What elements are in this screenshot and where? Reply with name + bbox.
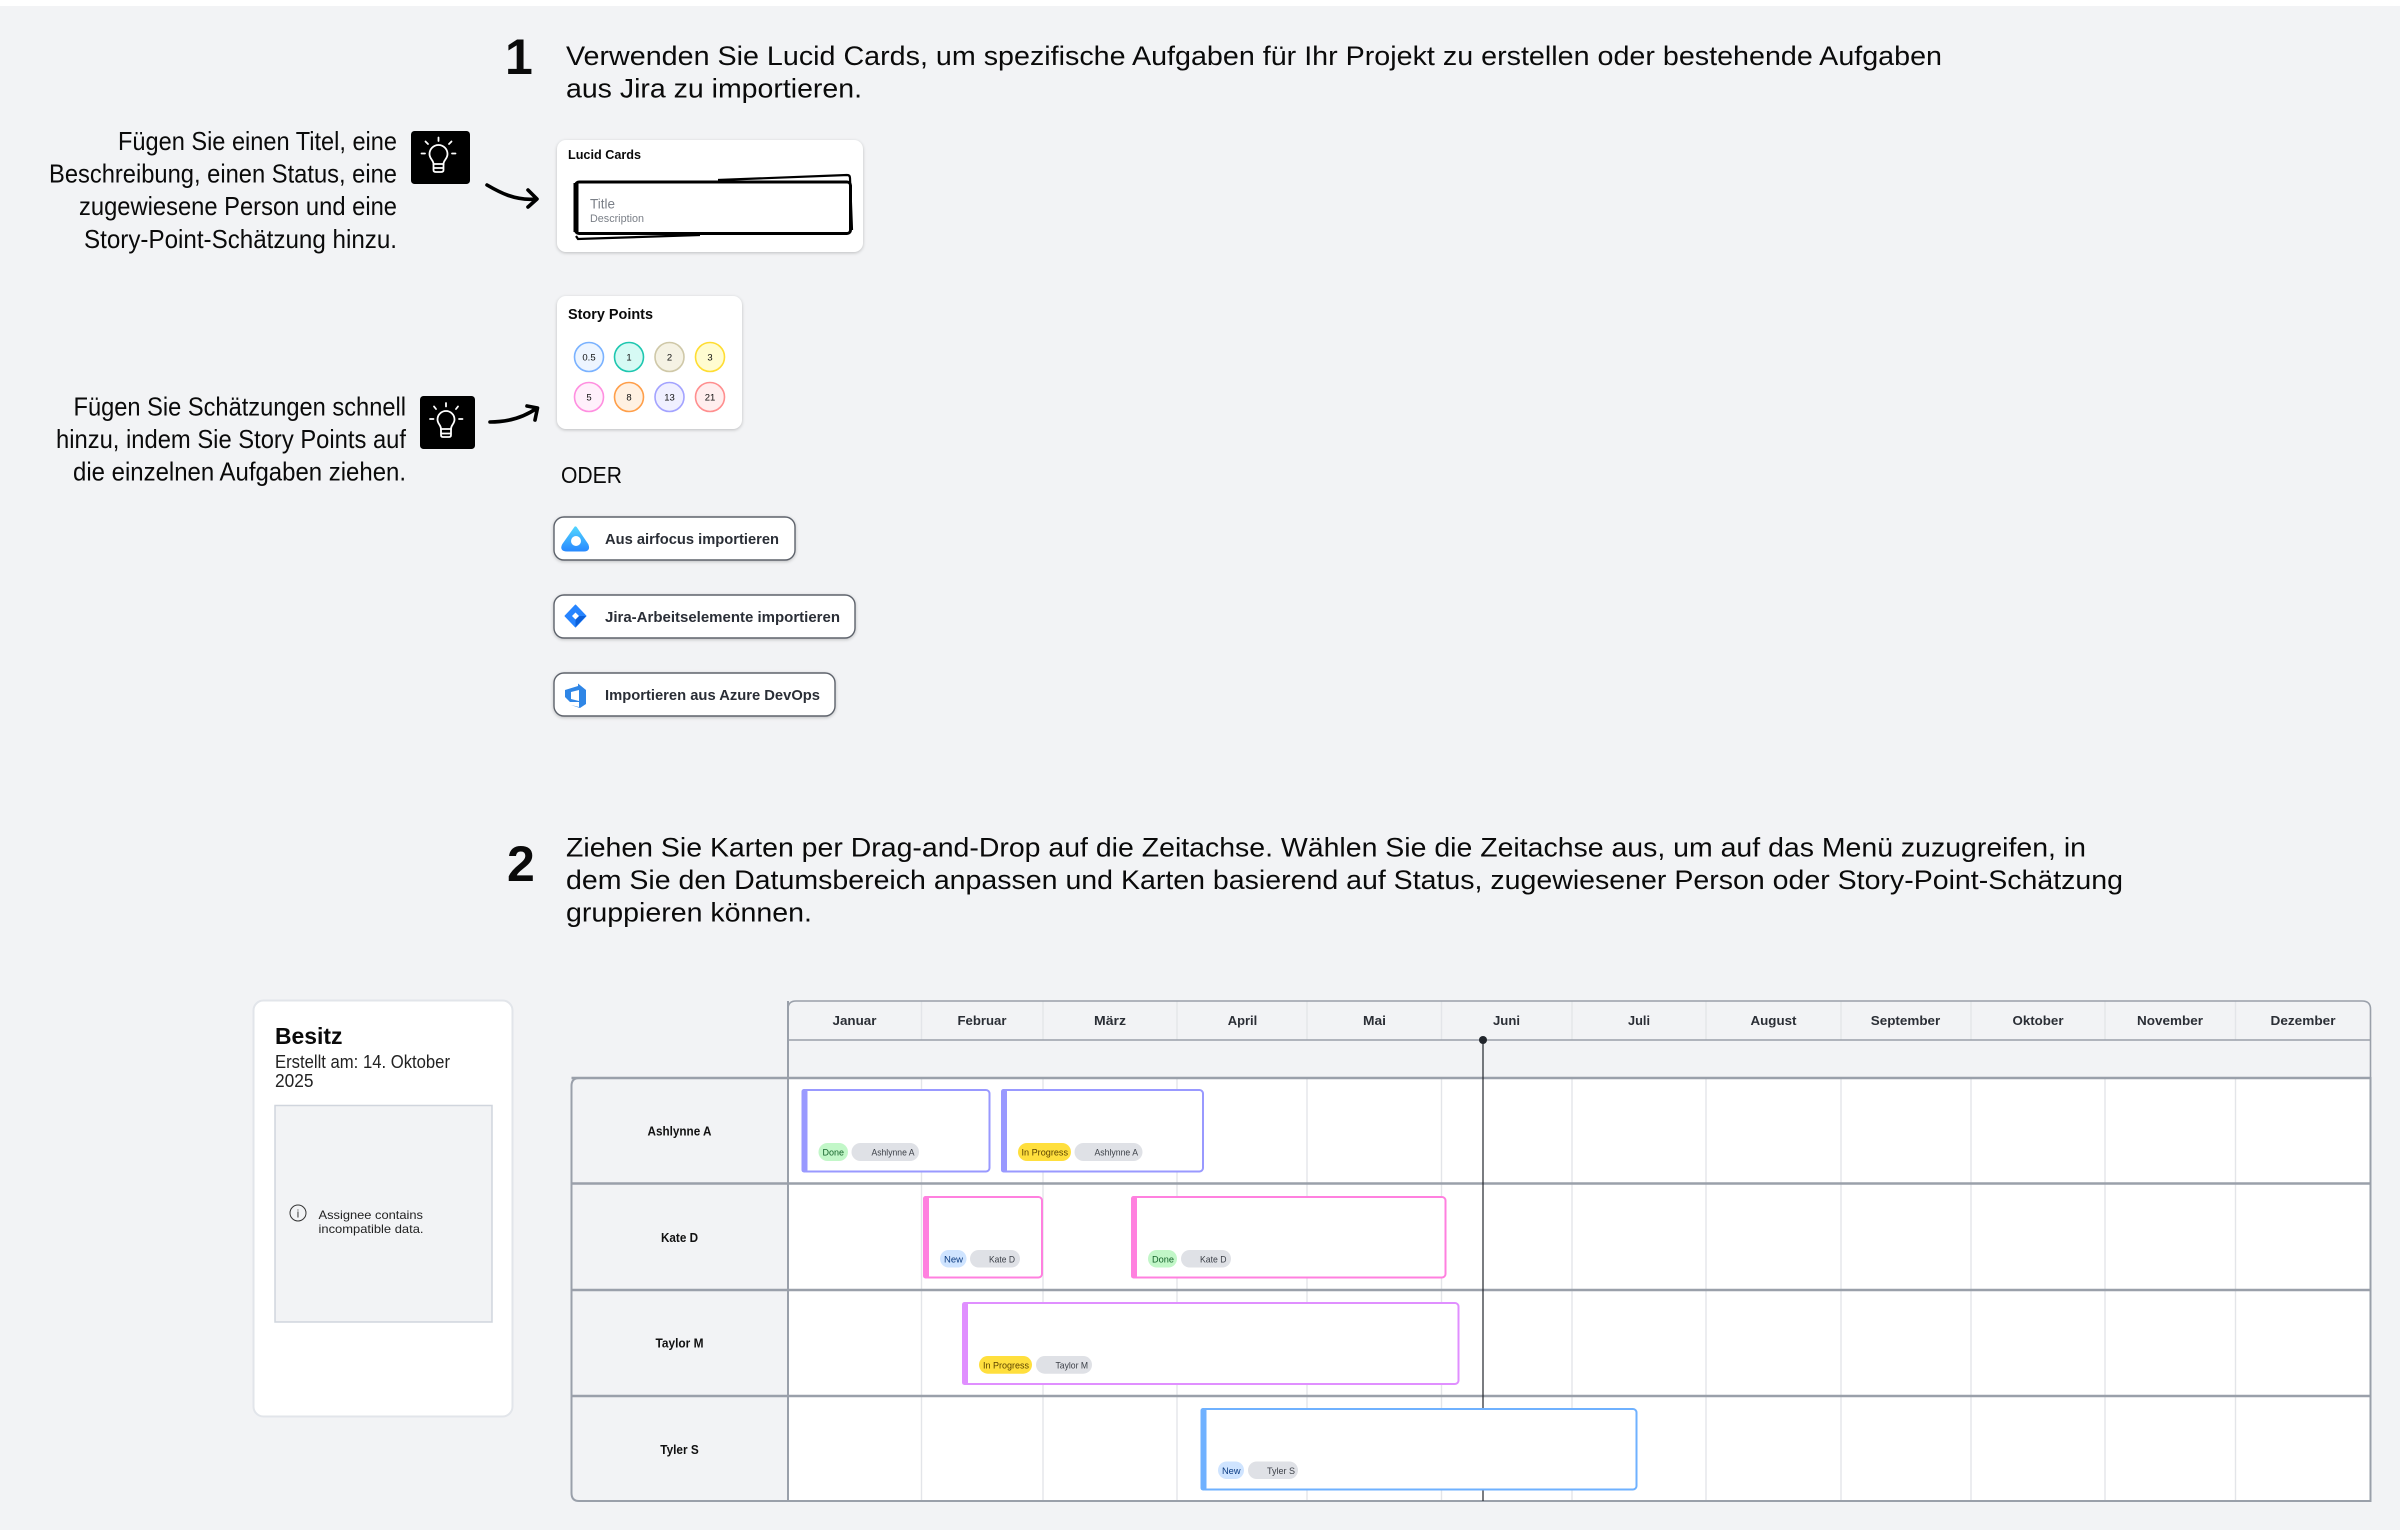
text block: card tip: [49, 126, 397, 254]
card: Ashlynne Done: [802, 1089, 990, 1172]
notice box: assignee data: [275, 1106, 492, 1322]
heading: step 2: dem Sie den Datumsbereich anpassen und Karten basierend auf Status, zugewiesener Person oder Story-Point-Schätzung: [566, 865, 2123, 895]
notice box: assignee data: Assignee contains: [318, 1208, 423, 1222]
card: Kate New: [923, 1196, 1042, 1278]
story point circles: 0.5: [582, 352, 596, 364]
card: Ashlynne Done: Done: [822, 1146, 844, 1158]
card: Taylor In Progress: [962, 1302, 1458, 1385]
button: Jira import: [554, 595, 855, 638]
month labels: Februar: [958, 1013, 1006, 1028]
arrow to Story Points panel: [490, 406, 538, 422]
story point circles: 8: [626, 392, 632, 404]
notice box: assignee data: incompatible data.: [318, 1222, 424, 1236]
button: Jira import: Jira-Arbeitselemente importieren: [605, 609, 840, 626]
story point circles: 5: [586, 392, 592, 404]
row labels: Kate D: [661, 1231, 698, 1245]
card: Taylor In Progress: Taylor M: [1056, 1360, 1088, 1370]
month labels: August: [1750, 1013, 1797, 1028]
story point circles: 13: [664, 392, 675, 404]
text block: card tip: Story-Point-Schätzung hinzu.: [84, 224, 397, 254]
sketchy card stack: Title: [590, 196, 615, 212]
month labels: September: [1871, 1013, 1940, 1028]
card: Tyler New: New: [1222, 1465, 1241, 1476]
button: Azure DevOps import: [554, 673, 835, 716]
button: airfocus import: [554, 517, 795, 560]
icon: info: [290, 1205, 306, 1221]
panel: Besitz: [254, 1000, 512, 1416]
heading: step 1: Verwenden Sie Lucid Cards, um spezifische Aufgaben für Ihr Projekt zu erstellen oder bestehende Aufgaben: [566, 41, 1942, 71]
heading: step 1: aus Jira zu importieren.: [566, 74, 862, 104]
created date: 2025: [275, 1071, 314, 1091]
heading: step 2: [566, 832, 2123, 928]
card: Tyler New: Tyler S: [1267, 1465, 1295, 1476]
heading: step 2: gruppieren können.: [566, 898, 812, 928]
card: Ashlynne In Progress: [1001, 1089, 1203, 1172]
month labels: Januar: [832, 1013, 876, 1028]
step number 2: 2: [507, 836, 535, 892]
month labels: [832, 1013, 2336, 1028]
today marker: [1479, 1036, 1487, 1501]
icon: airfocus: [563, 528, 588, 550]
sketchy card stack: Description: [590, 213, 644, 225]
month labels: April: [1228, 1013, 1257, 1028]
story point circles: [574, 342, 724, 412]
month labels: Mai: [1363, 1013, 1386, 1028]
icon: light bulb 2: [420, 396, 475, 449]
story point circles: 1: [626, 352, 632, 364]
row labels: Tyler S: [660, 1443, 699, 1457]
text block: card tip: Beschreibung, einen Status, eine: [49, 158, 397, 188]
month labels: Oktober: [2012, 1013, 2064, 1028]
month grid lines: [922, 1001, 2236, 1501]
arrow to Lucid Cards panel: [487, 185, 537, 207]
month labels: März: [1094, 1013, 1127, 1028]
timeline header frame: [788, 1001, 2370, 1078]
created date: [275, 1052, 450, 1091]
story point circles: 21: [705, 392, 715, 404]
month labels: November: [2137, 1013, 2203, 1028]
card: Ashlynne Done: Ashlynne A: [872, 1146, 915, 1158]
created date: Erstellt am: 14. Oktober: [275, 1052, 450, 1072]
panel title: Story Points: Story Points: [568, 307, 653, 323]
text block: story point tip: Fügen Sie Schätzungen schnell: [74, 392, 406, 422]
sketchy card stack: [576, 175, 852, 239]
label: ODER: ODER: [561, 462, 622, 488]
row labels: Ashlynne A: [648, 1124, 712, 1138]
button: airfocus import: Aus airfocus importieren: [605, 531, 779, 548]
month labels: Juli: [1628, 1013, 1650, 1028]
icon: Azure DevOps: [565, 684, 586, 708]
step number 1: 1: [505, 29, 533, 85]
icon: Jira: [565, 605, 586, 627]
card: Kate Done: Kate D: [1200, 1254, 1227, 1264]
icon: info: i: [297, 1208, 299, 1220]
panel title: Lucid Cards: Lucid Cards: [568, 147, 641, 162]
card: Ashlynne In Progress: In Progress: [1022, 1146, 1068, 1158]
card: Ashlynne In Progress: Ashlynne A: [1094, 1146, 1139, 1158]
panel: Story Points: [557, 296, 742, 429]
heading: step 1: [566, 41, 1942, 104]
card: Kate New: Kate D: [989, 1254, 1015, 1264]
month labels: Juni: [1493, 1013, 1520, 1028]
card: Tyler New: [1200, 1408, 1636, 1490]
card: Taylor In Progress: In Progress: [983, 1360, 1029, 1370]
row frame: [572, 1001, 2370, 1501]
story point circles: 3: [707, 352, 713, 364]
button: Azure DevOps import: Importieren aus Azure DevOps: [605, 687, 820, 704]
row labels: Taylor M: [656, 1336, 704, 1350]
story point circles: 2: [667, 352, 672, 364]
panel: Lucid Cards: [557, 140, 863, 252]
text block: story point tip: die einzelnen Aufgaben ziehen.: [73, 456, 406, 486]
card: Kate New: New: [944, 1254, 963, 1264]
text block: story point tip: [56, 392, 407, 486]
panel title: Besitz: Besitz: [275, 1023, 342, 1049]
heading: step 2: Ziehen Sie Karten per Drag-and-Drop auf die Zeitachse. Wählen Sie die Zeitachse aus, um auf das Menü zuzugreifen, in: [566, 832, 2086, 862]
text block: card tip: Fügen Sie einen Titel, eine: [118, 126, 397, 156]
row labels: [648, 1124, 712, 1457]
card: Kate Done: Done: [1152, 1254, 1174, 1264]
month labels: Dezember: [2270, 1013, 2336, 1028]
text block: card tip: zugewiesene Person und eine: [79, 191, 397, 221]
timeline body: [788, 1078, 2370, 1501]
card: Kate Done: [1131, 1196, 1446, 1278]
chart: timeline: [572, 1001, 2370, 1501]
icon: light bulb 1: [411, 131, 470, 184]
text block: story point tip: hinzu, indem Sie Story Points auf: [56, 424, 407, 454]
